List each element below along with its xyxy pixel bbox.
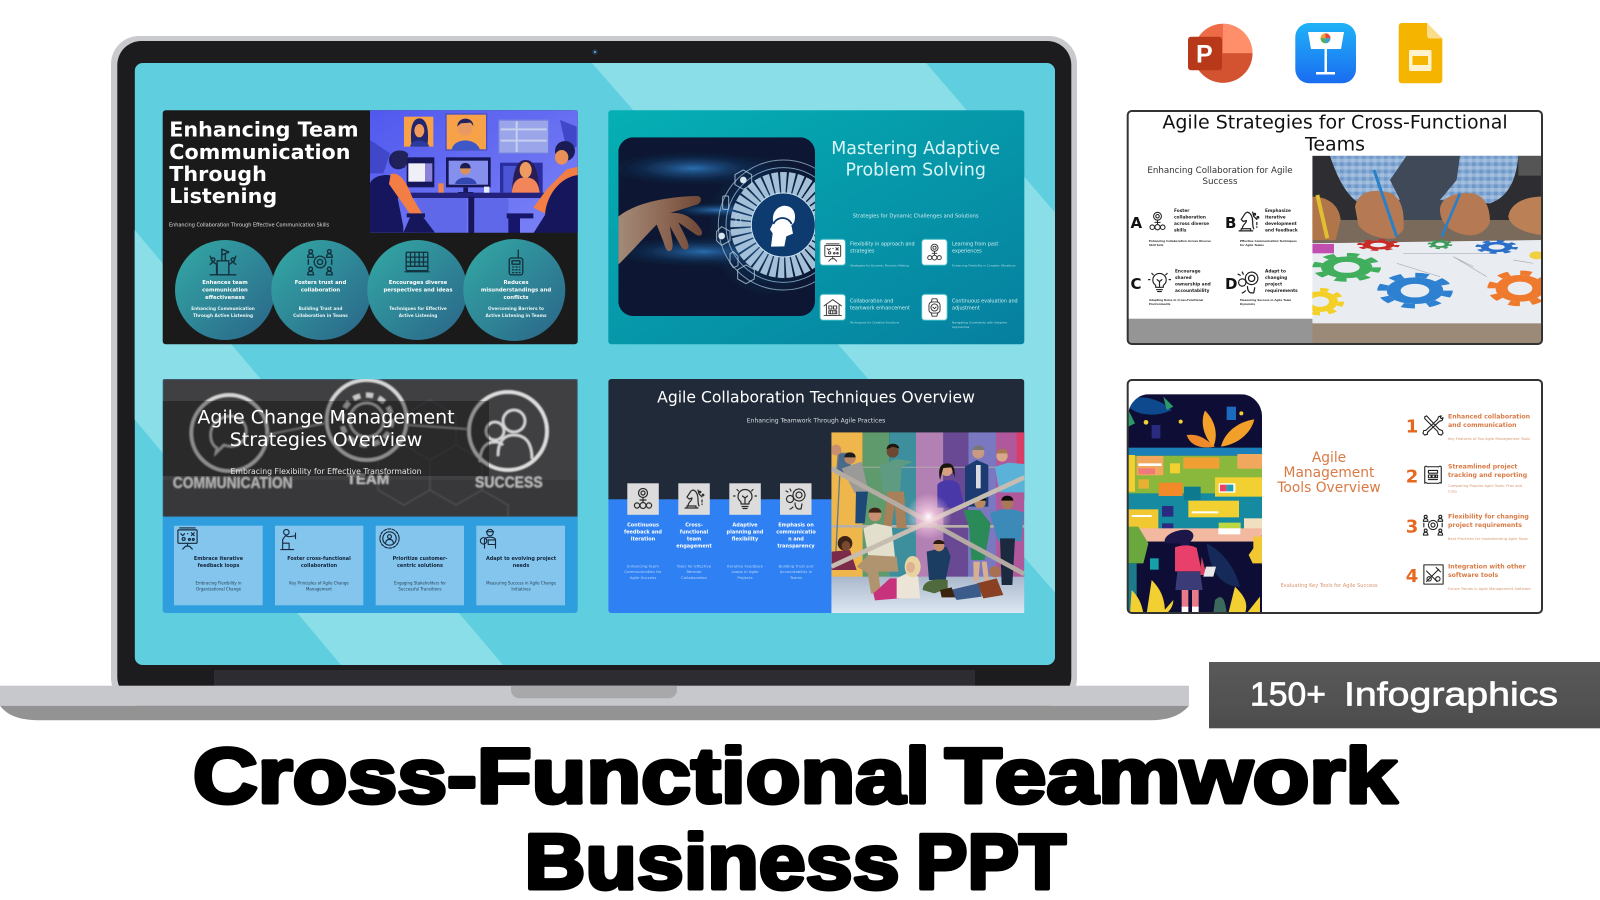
item: collaboration: Techniques for Creative Solutions	[849, 321, 899, 325]
photo: chalkboard communication team success: SUCCESS	[475, 474, 543, 491]
badge: 150+ Infographics	[1209, 662, 1600, 728]
item 2	[1406, 463, 1527, 494]
circle: reduces misunderstandings: misunderstandings and	[481, 287, 551, 293]
column: adaptive planning: Iterative Feedback	[727, 563, 764, 568]
item 3: 3	[1406, 517, 1418, 538]
slide title: Strategies Overview	[230, 429, 422, 451]
thumbnail subtitle: Enhancing Collaboration for Agile	[1147, 166, 1293, 176]
thumbnail title: Agile Strategies for Cross-Functional	[1162, 112, 1508, 134]
card: customer-centric solutions: Successful Transitions	[398, 586, 442, 591]
card: cross-functional collaboration: Foster cross-functional	[287, 556, 351, 562]
card: evolving project needs: needs	[513, 563, 529, 569]
thumbnail subtitle: Evaluating Key Tools for Agile Success	[1280, 583, 1378, 589]
card: evolving project needs: Adapt to evolving project	[486, 556, 557, 562]
slide: Agile Change Management Strategies Overview	[163, 379, 578, 613]
slide subtitle: Strategies for Dynamic Challenges and Solutions	[853, 214, 979, 220]
item 2: tracking and reporting	[1448, 472, 1527, 479]
card: customer-centric solutions: Prioritize customer-	[393, 556, 447, 562]
column: adaptive planning: Projects	[737, 575, 753, 580]
badge: 150+ Infographics: 150+	[1250, 677, 1326, 714]
laptop	[0, 36, 1189, 720]
item C: accountability	[1175, 288, 1210, 294]
item B: Emphasize	[1265, 208, 1291, 214]
item 1: 1	[1406, 417, 1418, 438]
item 2: Comparing Popular Agile Tools: Pros and	[1448, 484, 1522, 488]
item: learning: Learning from past	[952, 242, 998, 248]
item B: and feedback	[1265, 228, 1298, 234]
item 3: Best Practices for Implementing Agile Tools	[1448, 537, 1528, 541]
column: communication and transparency: Accountability in	[780, 569, 813, 574]
card: iterative feedback: Embrace iterative	[194, 556, 244, 562]
slide title: Agile Change Management	[197, 406, 455, 428]
column: cross-functional engagement: engagement	[676, 543, 712, 549]
card: evolving project needs	[476, 526, 565, 605]
circle: trust and collaboration: Collaboration in Teams	[293, 313, 348, 319]
circle: diverse perspectives: Encourages diverse	[389, 280, 448, 286]
item C: Adapting Roles in Cross-Functional	[1149, 298, 1203, 302]
item D: Dynamics	[1240, 302, 1255, 306]
item D: D	[1225, 275, 1237, 293]
item: collaboration: teamwork enhancement	[850, 306, 910, 312]
column: communication and transparency: n and	[788, 536, 804, 542]
photo: hands drawing gears	[1299, 156, 1548, 343]
item D: project	[1265, 282, 1282, 288]
column: adaptive planning: Adaptive	[732, 523, 758, 529]
item 2: 2	[1406, 467, 1418, 488]
slide title: Listening	[169, 184, 277, 208]
column: communication and transparency: communicatio	[776, 530, 816, 536]
gray footer band	[1128, 319, 1312, 344]
item: flexibility: strategies	[850, 249, 875, 255]
item 4: 4	[1406, 566, 1418, 587]
photo: chalkboard communication team success	[162, 379, 578, 517]
column: adaptive planning	[727, 483, 764, 580]
slide title: Agile Collaboration Techniques Overview	[657, 389, 975, 407]
item C: ownership and	[1175, 282, 1211, 288]
circle: diverse perspectives: perspectives and ideas	[384, 287, 452, 293]
circle: reduces misunderstandings	[463, 239, 565, 341]
circle: trust and collaboration: collaboration	[301, 287, 340, 293]
app logos	[1188, 23, 1442, 83]
card: cross-functional collaboration: collaboration	[301, 563, 338, 569]
item B: for Agile Teams	[1240, 243, 1264, 247]
column: continuous feedback: iteration	[631, 536, 656, 542]
slide title: Communication	[169, 140, 351, 164]
item: flexibility: Flexibility in approach and	[850, 242, 915, 248]
circle: reduces misunderstandings: Overcoming Barriers to	[488, 306, 544, 312]
card: iterative feedback: Embracing Flexibility in	[196, 580, 242, 585]
item D: requirements	[1265, 288, 1298, 294]
circle: diverse perspectives: Active Listening	[399, 313, 437, 319]
slide thumbnail: Agile Management Tools Overview	[1127, 380, 1542, 614]
item A: A	[1130, 214, 1142, 232]
item D: Adapt to	[1265, 268, 1286, 274]
item 4: Future Trends in Agile Management Software	[1448, 587, 1531, 591]
slide title: Enhancing Team	[169, 118, 359, 142]
circle: team communication: communication	[202, 287, 248, 293]
card: iterative feedback: feedback loops	[198, 563, 239, 569]
item 1	[1406, 413, 1530, 441]
column: communication and transparency: Emphasis on	[778, 523, 814, 529]
column: continuous feedback	[624, 483, 662, 580]
item 4: Integration with other	[1448, 563, 1527, 570]
circle: team communication: Enhances team	[202, 280, 248, 286]
column: adaptive planning: flexibility	[732, 536, 759, 542]
thumbnail border	[1128, 380, 1542, 613]
slide title: Through	[169, 162, 267, 186]
column: continuous feedback: Enhancing Team	[627, 563, 659, 568]
circle: team communication: Through Active Listening	[193, 313, 253, 319]
item 2: Streamlined project	[1448, 463, 1517, 470]
laptop base	[0, 686, 1189, 720]
circle: trust and collaboration: Building Trust and	[299, 306, 342, 312]
card: evolving project needs: Initiatives	[511, 586, 531, 591]
thumbnail title: Agile	[1312, 450, 1346, 466]
thumbnail subtitle: Success	[1203, 177, 1238, 187]
badge: 150+ Infographics: Infographics	[1344, 677, 1558, 714]
column: continuous feedback: Agile Success	[630, 575, 656, 580]
circle: team communication	[175, 240, 275, 340]
item A: Skill Sets	[1149, 243, 1164, 247]
item: evaluation: Approaches	[952, 325, 970, 329]
item C	[1130, 268, 1211, 306]
item 4	[1406, 563, 1531, 591]
main title	[193, 732, 1398, 900]
column: cross-functional engagement: Tools for Effective	[676, 563, 712, 568]
card: iterative feedback	[174, 526, 263, 605]
illustration: video call meeting	[370, 110, 578, 233]
column: cross-functional engagement	[676, 483, 712, 580]
slide subtitle: Enhancing Teamwork Through Agile Practices	[747, 417, 885, 424]
slide: Agile Collaboration Techniques Overview	[608, 379, 1024, 613]
item C: Encourage	[1175, 268, 1201, 274]
photo: hand touching digital interface	[618, 137, 815, 316]
icon: PowerPoint: P	[1196, 40, 1213, 68]
item A: skills	[1174, 228, 1187, 234]
circle: diverse perspectives	[367, 240, 467, 340]
item 2: Cons	[1448, 490, 1457, 494]
card: customer-centric solutions	[376, 526, 464, 605]
column: adaptive planning: Loops in Agile	[731, 569, 759, 574]
slide thumbnail: Agile Strategies for Cross-Functional Teams	[1128, 111, 1548, 344]
circle: team communication: Enhancing Communication	[191, 306, 255, 312]
illustration: woman at kanban board	[1127, 394, 1263, 614]
circle: trust and collaboration	[271, 240, 371, 340]
photo: chalkboard communication team success: COMMUNICATION	[173, 475, 293, 492]
item: learning	[922, 239, 1016, 268]
laptop lid bezel	[111, 36, 1077, 706]
photo: chalkboard communication team success: TEAM	[347, 471, 389, 488]
slide: Mastering Adaptive Problem Solving	[597, 110, 1024, 344]
column: continuous feedback: Communication for	[624, 569, 662, 574]
column: cross-functional engagement: functional	[680, 530, 709, 536]
item: evaluation: Continuous evaluation and	[952, 299, 1018, 305]
item: learning: Enhancing Flexibility in Complex Situations	[952, 264, 1016, 268]
item C: C	[1130, 275, 1142, 293]
laptop screen background	[134, 63, 1055, 665]
item 1: Key Features of Top Agile Management Tools	[1448, 437, 1530, 441]
item D: Measuring Success in Agile Team	[1240, 298, 1291, 302]
thumbnail title: Management	[1284, 465, 1375, 481]
item C: Environments	[1149, 302, 1171, 306]
card: customer-centric solutions: Engaging Stakeholders for	[394, 580, 446, 585]
card: customer-centric solutions: centric solutions	[397, 563, 443, 569]
circle: team communication: effectiveness	[205, 295, 245, 301]
card: iterative feedback: Organizational Change	[196, 586, 242, 591]
slide subtitle: Enhancing Collaboration Through Effective Communication Skills	[169, 223, 330, 229]
column: cross-functional engagement: Collaboration	[681, 575, 707, 580]
circle: reduces misunderstandings: Active Listening in Teams	[485, 313, 547, 319]
slide: Enhancing Team Communication Through Listening	[163, 110, 578, 344]
column: continuous feedback: feedback and	[624, 530, 662, 536]
item B: B	[1225, 214, 1236, 232]
item C: shared	[1175, 275, 1192, 281]
item: flexibility	[820, 239, 915, 268]
circle: reduces misunderstandings: Reduces	[503, 280, 529, 286]
item A: collaboration	[1174, 214, 1206, 220]
column: communication and transparency: transparency	[777, 543, 815, 549]
item 4: software tools	[1448, 572, 1498, 579]
item: collaboration: Collaboration and	[850, 299, 893, 305]
item 1: Enhanced collaboration	[1448, 413, 1530, 420]
item: evaluation	[922, 294, 1018, 329]
slide title: Mastering Adaptive	[831, 139, 1000, 159]
item 3: project requirements	[1448, 522, 1522, 529]
column: adaptive planning: planning and	[727, 530, 764, 536]
column: continuous feedback: Continuous	[627, 523, 659, 529]
card: cross-functional collaboration: Management	[306, 586, 332, 591]
main title: Cross-Functional	[193, 732, 930, 820]
item B	[1225, 208, 1298, 247]
item 3	[1406, 513, 1529, 541]
icon: PowerPoint	[1188, 24, 1252, 83]
thumbnail border	[1128, 111, 1542, 344]
item B: iterative	[1265, 214, 1286, 220]
item D: changing	[1265, 275, 1287, 281]
card: cross-functional collaboration	[275, 526, 363, 605]
item A: across diverse	[1174, 221, 1209, 227]
slide title: Problem Solving	[846, 161, 986, 181]
icon: Google Slides	[1399, 23, 1442, 83]
item A	[1130, 208, 1211, 247]
slide subtitle: Embracing Flexibility for Effective Transformation	[230, 467, 422, 476]
item: flexibility: Strategies for Dynamic Decision Making	[850, 264, 909, 268]
main title: Teamwork	[945, 732, 1398, 820]
photo: team in colourful studio	[831, 432, 1024, 613]
column: cross-functional engagement: team	[687, 536, 701, 542]
column: communication and transparency: Building Trust and	[778, 563, 814, 568]
item B: development	[1265, 221, 1297, 227]
thumbnail title: Teams	[1304, 134, 1365, 156]
column: communication and transparency: Teams	[789, 575, 802, 580]
item 1: and communication	[1448, 422, 1516, 429]
item D	[1225, 268, 1298, 306]
item: learning: experiences	[952, 249, 982, 255]
column: communication and transparency	[776, 483, 816, 580]
item: evaluation: Navigating Uncertainty with Adaptive	[952, 321, 1007, 325]
card: evolving project needs: Measuring Success in Agile Change	[486, 580, 556, 585]
circle: diverse perspectives: Techniques for Effective	[389, 306, 447, 312]
item A: Enhancing Collaboration Across Diverse	[1149, 239, 1211, 243]
icon: Keynote	[1295, 23, 1356, 83]
column: cross-functional engagement: Cross-	[685, 523, 703, 529]
column: cross-functional engagement: Remote	[686, 569, 702, 574]
item A: Foster	[1174, 208, 1190, 214]
item 3: Flexibility for changing	[1448, 513, 1529, 520]
thumbnail title: Tools Overview	[1276, 480, 1381, 496]
item: collaboration	[820, 294, 910, 325]
circle: reduces misunderstandings: conflicts	[503, 295, 529, 301]
card: cross-functional collaboration: Key Principles of Agile Change	[289, 580, 349, 585]
item: evaluation: adjustment	[952, 306, 980, 312]
item B: Effective Communication Techniques	[1240, 239, 1297, 243]
circle: trust and collaboration: Fosters trust and	[295, 280, 346, 286]
